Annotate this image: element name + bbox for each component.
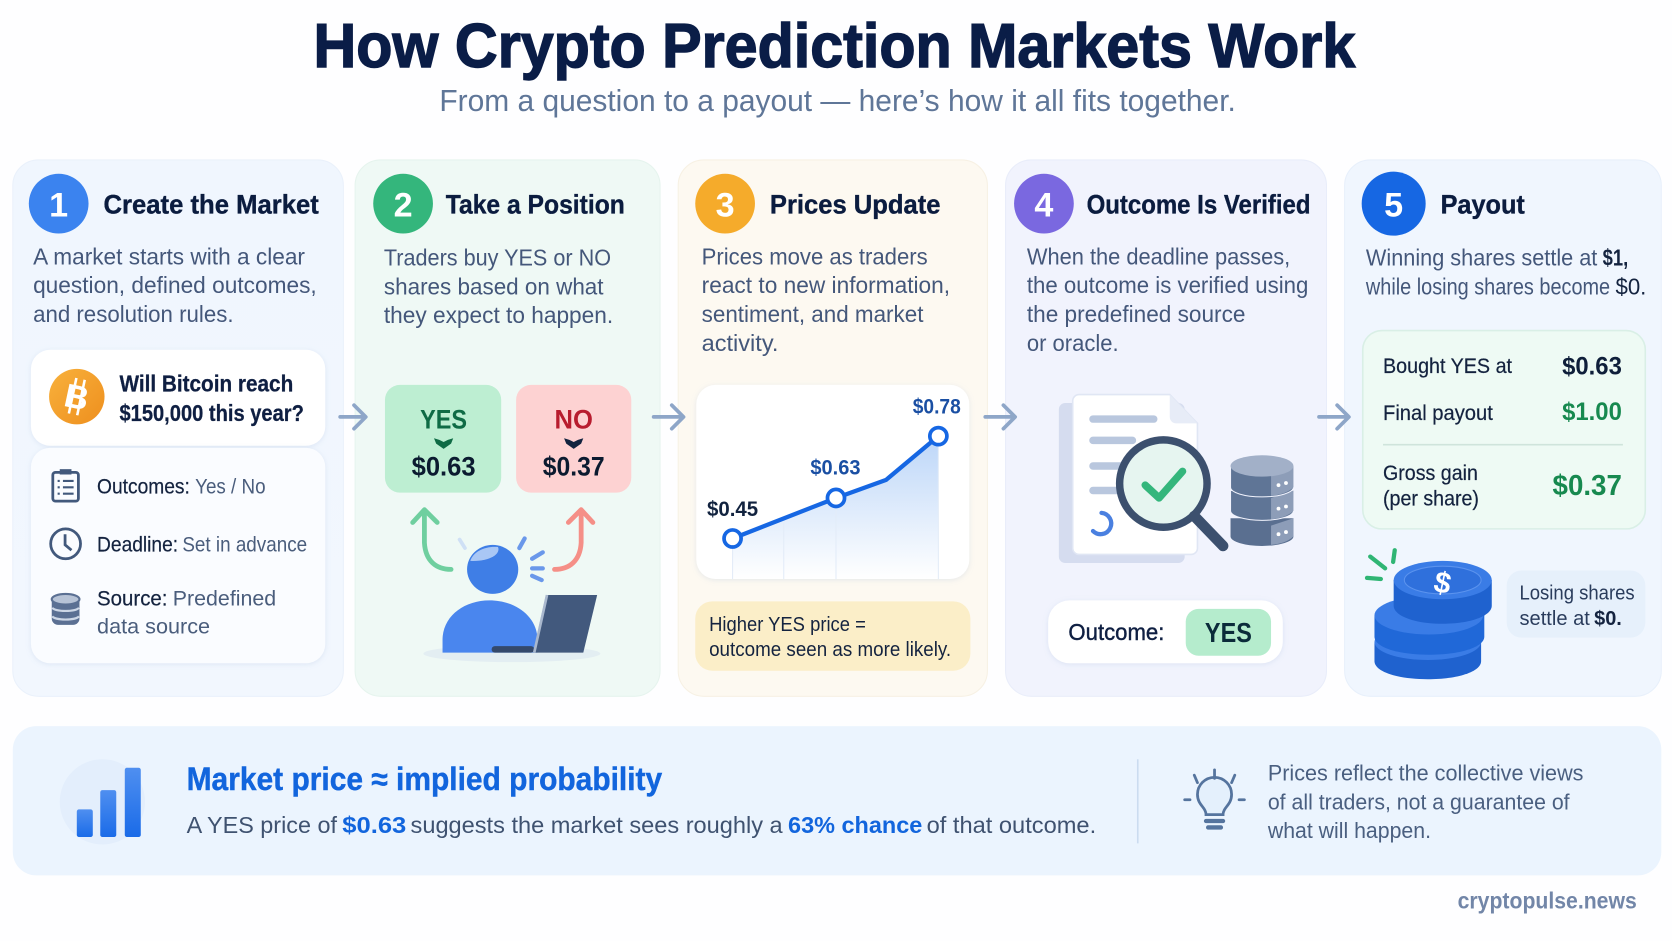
payout table: $0.63 [1562, 353, 1622, 380]
question text: $150,000 this year? [119, 400, 304, 426]
outcome badge: YES [1205, 617, 1252, 648]
line chart card: $0.45 [707, 497, 758, 521]
note: losing shares: $0. [1594, 608, 1622, 630]
question card [31, 350, 325, 446]
outcome badge [1048, 600, 1283, 663]
step number 3: 3 [716, 186, 735, 224]
step number 2 [373, 174, 433, 234]
icon: sparkle [1367, 550, 1395, 579]
description [33, 243, 317, 327]
arrow: step 3 to 4 [985, 405, 1015, 429]
payout table: (per share) [1383, 486, 1479, 510]
subtitle: From a question to a payout — here’s how it all fits together. [439, 83, 1236, 118]
icon: bitcoin coin [49, 369, 105, 424]
source row: Source: [97, 587, 167, 611]
no price box: $0.37 [543, 452, 605, 482]
side note [1267, 761, 1584, 843]
description: sentiment, and market [702, 301, 924, 327]
payout table: $0.37 [1553, 470, 1622, 502]
step number 5: 5 [1384, 186, 1403, 224]
yes price box [385, 385, 501, 493]
description [384, 245, 613, 328]
payout table [1363, 331, 1645, 529]
icon: light bulb [1185, 770, 1244, 827]
heading: Outcome Is Verified [1087, 189, 1310, 219]
icon: bitcoin coin: B [61, 377, 92, 418]
description: $1, [1603, 245, 1628, 271]
payout table: Gross gain [1383, 461, 1478, 485]
description [1027, 243, 1308, 356]
heading: Payout [1441, 189, 1525, 219]
source row: data source [97, 614, 210, 638]
yes price box: YES [420, 405, 467, 435]
deadline row: Set in advance [182, 532, 307, 556]
description: activity. [702, 330, 778, 356]
source row: Predefined [173, 587, 276, 611]
step number 3 [695, 174, 755, 234]
step number 2: 2 [394, 186, 413, 224]
details card [31, 448, 325, 663]
yes price box: $0.63 [412, 452, 476, 482]
description: shares based on what [384, 273, 604, 299]
note: losing shares: Losing shares [1519, 582, 1635, 604]
illustration: document, magnifier and database [1059, 395, 1293, 563]
panel: market price takeaway [13, 726, 1661, 875]
note: losing shares: settle at [1519, 608, 1590, 630]
explanation: $0.63 [342, 812, 406, 838]
icon: clipboard [53, 469, 78, 501]
panel: step 3 prices update [678, 160, 987, 696]
step number 5 [1362, 172, 1426, 236]
note: higher yes price: Higher YES price = [709, 614, 866, 636]
title: How Crypto Prediction Markets Work [314, 12, 1356, 81]
arrow: to yes [413, 510, 451, 569]
description: while losing shares become [1365, 273, 1610, 299]
description [702, 243, 950, 356]
arrow: step 4 to 5 [1319, 405, 1349, 429]
side note: what will happen. [1267, 818, 1431, 843]
description: question, defined outcomes, [33, 272, 317, 298]
panel: step 2 take a position [355, 160, 660, 696]
note: higher yes price: outcome seen as more likely. [709, 639, 951, 661]
description: and resolution rules. [33, 301, 234, 327]
explanation: A YES price of [187, 812, 337, 838]
no price box: NO [554, 405, 593, 435]
step number 4: 4 [1034, 186, 1053, 224]
description: A market starts with a clear [33, 243, 305, 269]
side note: of all traders, not a guarantee of [1268, 789, 1571, 814]
heading: Take a Position [446, 189, 625, 219]
heading: market price: Market price ≈ implied probability [187, 761, 662, 797]
description: the outcome is verified using [1027, 272, 1308, 298]
explanation: suggests the market sees roughly a [411, 812, 784, 838]
description: When the deadline passes, [1027, 243, 1290, 269]
icon: clock [51, 529, 81, 559]
icon: bar chart [60, 759, 145, 845]
arrow: step 2 to 3 [654, 405, 684, 429]
panel: step 4 outcome is verified [1006, 160, 1326, 696]
description: $0. [1615, 273, 1646, 299]
description: the predefined source [1027, 301, 1245, 327]
payout table: Bought YES at [1383, 354, 1512, 378]
source row [97, 587, 276, 638]
outcome badge: Outcome: [1068, 619, 1164, 645]
icon: coin stack: $ [1431, 565, 1454, 601]
outcomes row: Yes / No [195, 475, 266, 499]
description: Prices move as traders [702, 243, 928, 269]
icon: trader at laptop [423, 538, 600, 662]
description: they expect to happen. [384, 302, 613, 328]
side note: Prices reflect the collective views [1268, 761, 1584, 786]
note: losing shares [1507, 570, 1645, 638]
source credit: cryptopulse.news [1458, 887, 1637, 913]
outcomes row [97, 475, 266, 499]
step number 4 [1014, 174, 1074, 234]
note: higher yes price [695, 601, 970, 671]
description: Traders buy YES or NO [384, 245, 611, 271]
heading: Prices Update [770, 189, 940, 219]
question text [119, 370, 304, 426]
description: react to new information, [702, 272, 950, 298]
description [1365, 245, 1646, 299]
explanation: 63% chance [788, 812, 922, 838]
line chart card: $0.63 [810, 455, 861, 479]
outcomes row: Outcomes: [97, 475, 190, 499]
icon: database [52, 594, 79, 625]
deadline row [97, 532, 307, 556]
arrow: to no [554, 510, 593, 569]
question text: Will Bitcoin reach [119, 370, 293, 396]
line chart card: $0.78 [913, 395, 961, 419]
step number 1: 1 [49, 186, 68, 224]
panel: step 1 create the market [13, 160, 343, 696]
heading: Create the Market [103, 189, 319, 219]
no price box [516, 385, 631, 493]
explanation [187, 812, 1096, 838]
description: Winning shares settle at [1366, 245, 1598, 271]
line chart card [696, 385, 969, 579]
description: or oracle. [1027, 330, 1119, 356]
payout table: $1.00 [1562, 399, 1622, 426]
panel: step 5 payout [1345, 160, 1661, 696]
explanation: of that outcome. [927, 812, 1096, 838]
icon: coin stack [1374, 561, 1492, 679]
deadline row: Deadline: [97, 532, 178, 556]
arrow: step 1 to 2 [340, 405, 366, 429]
step number 1 [29, 174, 89, 234]
payout table: Final payout [1383, 401, 1493, 425]
